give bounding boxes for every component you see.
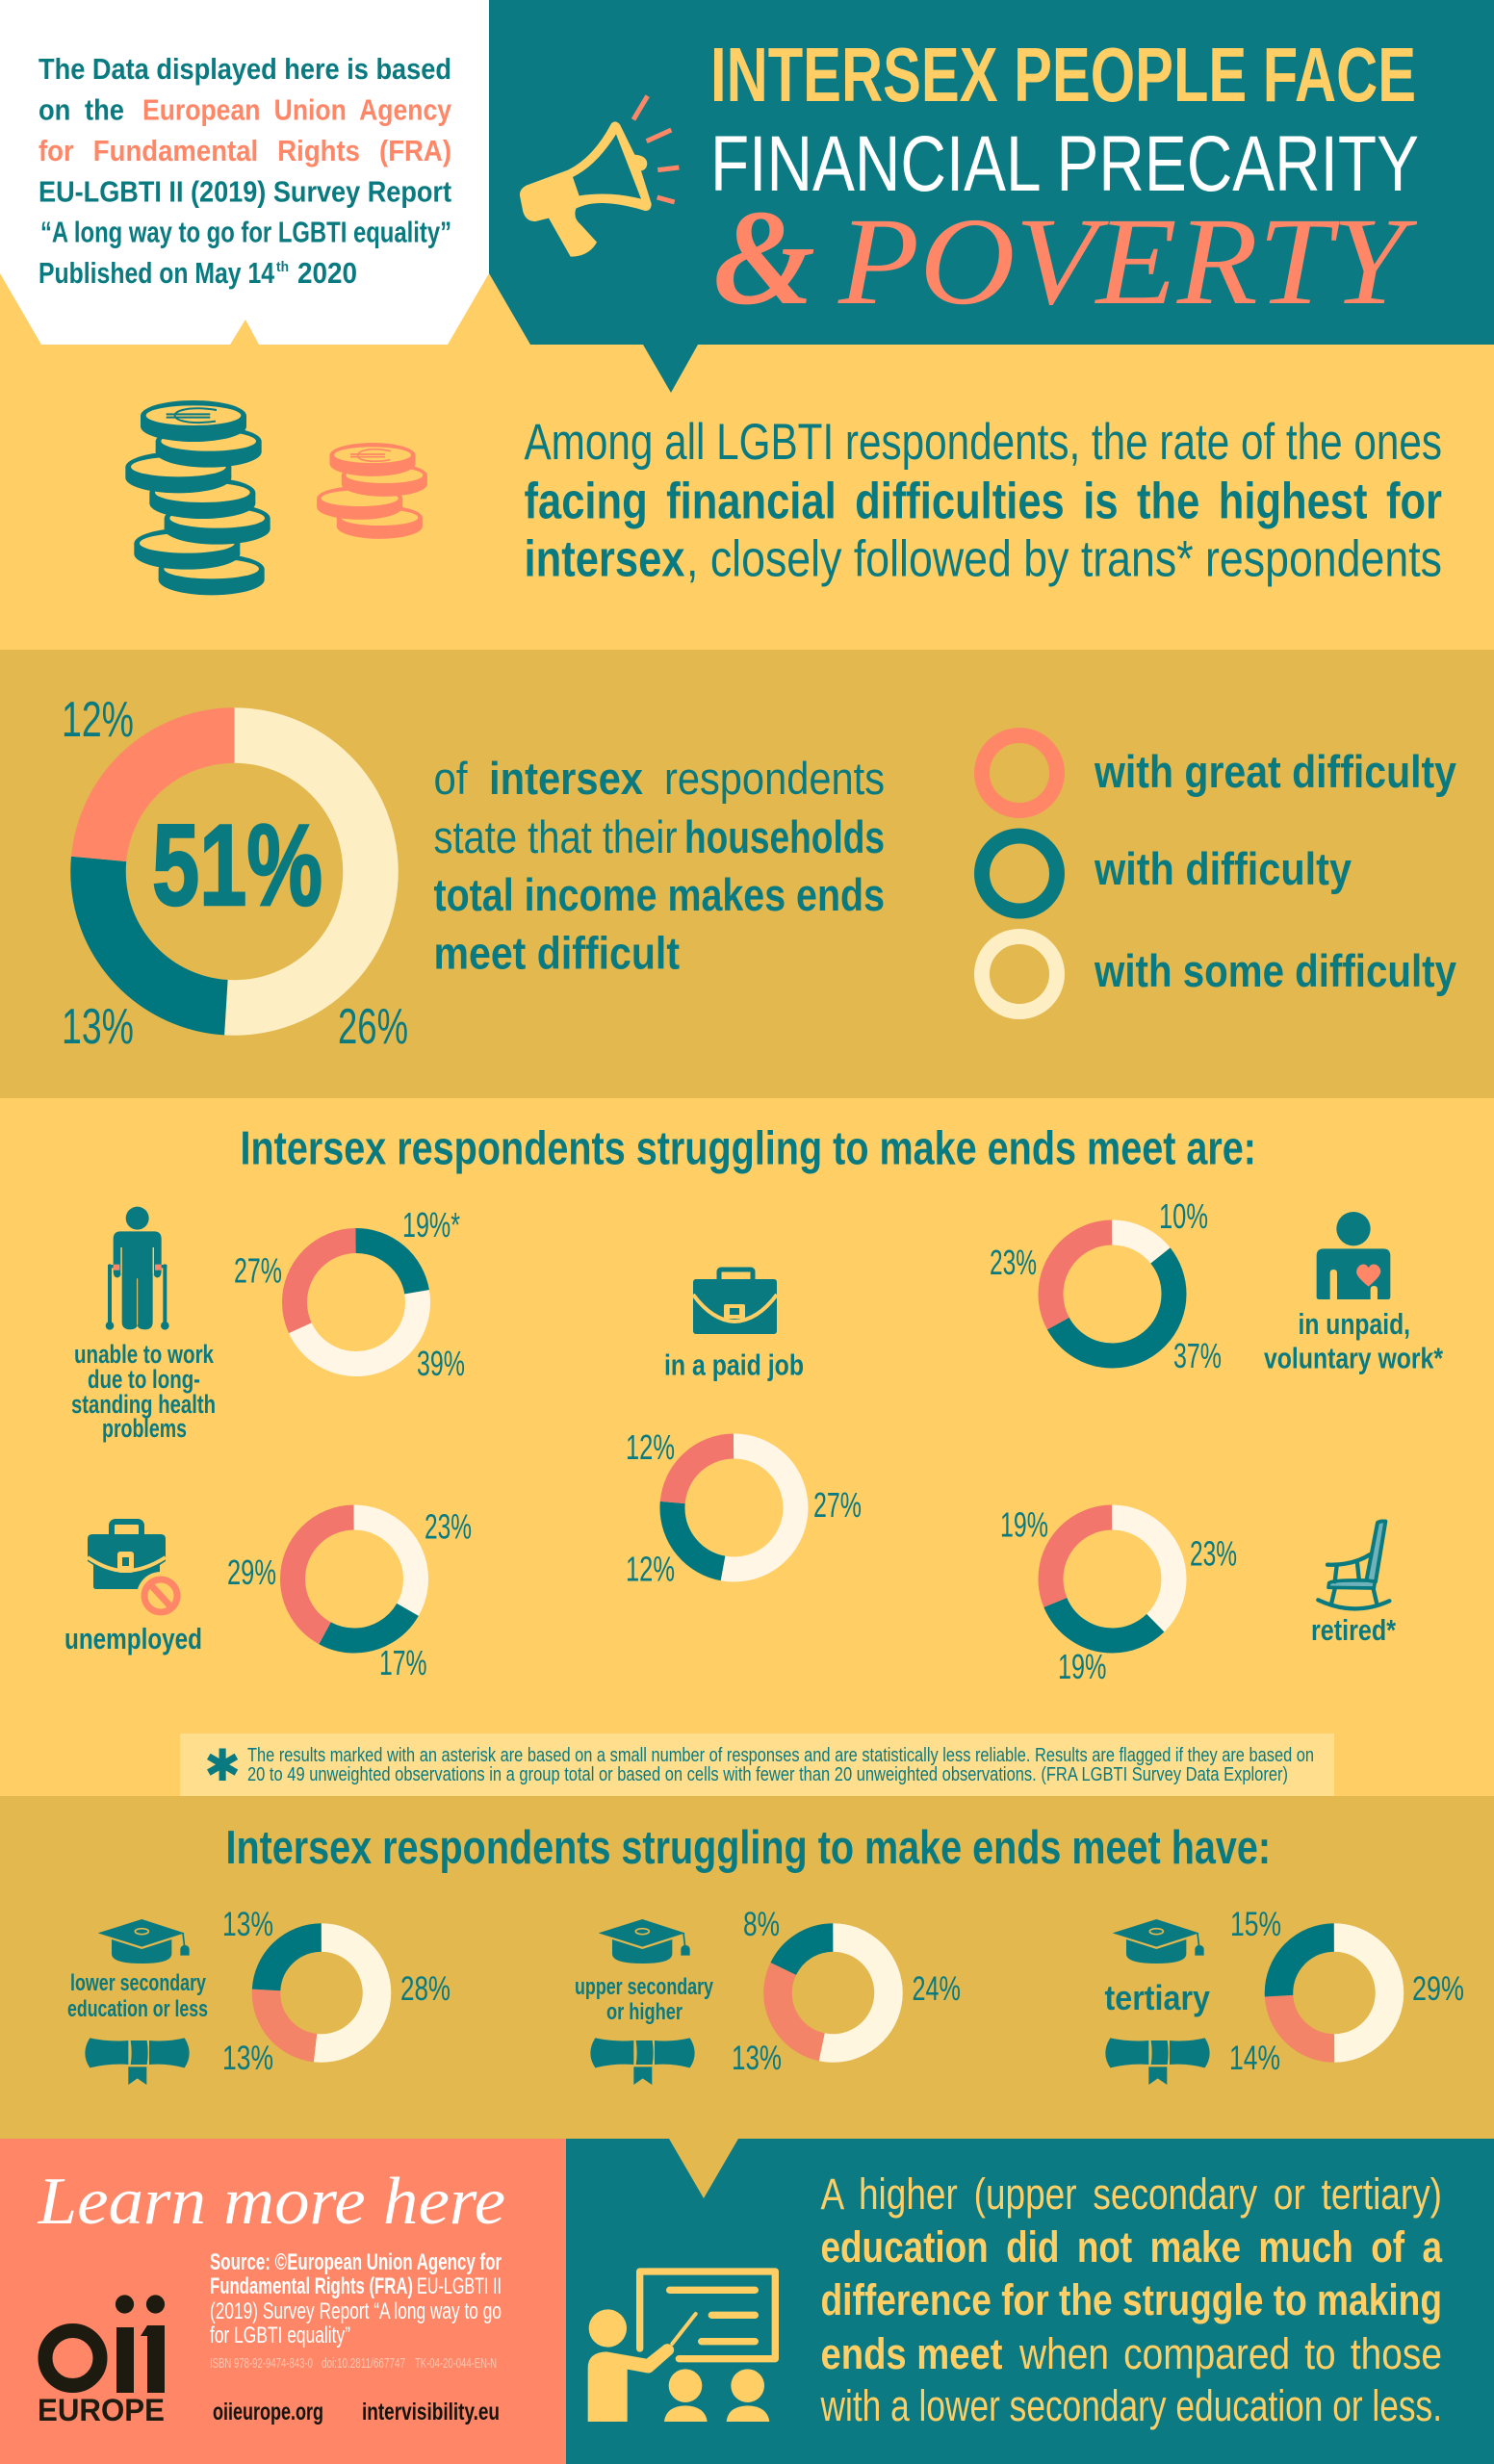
donut labels: 12% — [62, 692, 134, 748]
panel: data source note: EU-LGBTI II (2019) Survey Report — [39, 175, 451, 208]
overview text — [433, 753, 885, 978]
label: tertiary: tertiary — [1105, 1978, 1210, 2017]
chart: retired donut — [1051, 1517, 1174, 1640]
overview text: state that their — [433, 811, 678, 862]
label: unemployed: unemployed — [64, 1622, 202, 1656]
heading: Intersex respondents struggling to make ends meet have: — [225, 1822, 1271, 1874]
overview text: intersex — [489, 753, 643, 804]
asterisk footnote — [180, 1733, 1334, 1796]
legend: with difficulty — [1094, 843, 1352, 894]
icon: diploma upper secondary — [590, 2038, 695, 2085]
asterisk footnote: ✱ — [204, 1739, 241, 1791]
panel: data source note: “A long way to go for LGBTI equality” — [40, 216, 451, 248]
source text: (2019) Survey Report “A long way to go — [210, 2298, 502, 2324]
chart: main donut — [98, 735, 371, 1008]
icon: rocking chair — [1318, 1521, 1389, 1608]
donut labels: paid job — [626, 1427, 862, 1588]
icon: large teal coin stack — [125, 400, 270, 595]
donut labels: 13% — [62, 999, 134, 1055]
publication identifiers: TK-04-20-044-EN-N — [415, 2355, 497, 2372]
donut labels: upper secondary: 13% — [732, 2040, 782, 2077]
donut labels: tertiary — [1229, 1906, 1464, 2077]
label: unable to work: unable to work — [74, 1340, 215, 1369]
icon: person with crutches — [106, 1207, 169, 1330]
publication identifiers: ISBN 978-92-9474-843-0 — [210, 2355, 313, 2372]
donut labels: retired: 19% — [1058, 1647, 1107, 1686]
donut labels: voluntary work: 23% — [990, 1243, 1037, 1282]
overview text: of — [433, 753, 468, 804]
website links — [213, 2399, 500, 2426]
source text: Source: ©European Union Agency for — [210, 2249, 502, 2275]
donut labels: lower secondary — [222, 1906, 451, 2077]
label: in unpaid voluntary work: in unpaid, — [1298, 1307, 1410, 1341]
donut labels: retired: 23% — [1190, 1534, 1237, 1573]
chart: unemployed donut — [293, 1517, 416, 1640]
donut labels: upper secondary — [732, 1906, 961, 2077]
donut labels: upper secondary: 24% — [913, 1970, 961, 2008]
chart: tertiary donut — [1278, 1938, 1390, 2048]
panel: data source note: on the — [39, 92, 124, 127]
logo: OII Europe — [38, 2295, 165, 2427]
icon: graduation cap upper secondary — [599, 1919, 690, 1964]
donut labels: voluntary work — [990, 1196, 1222, 1375]
intro text: intersex — [524, 531, 685, 587]
panel: title banner — [489, 0, 1494, 393]
donut labels: tertiary: 14% — [1229, 2040, 1280, 2077]
label: upper secondary — [575, 1974, 713, 2025]
heading: Intersex respondents struggling to make ends meet are: — [241, 1122, 1256, 1174]
donut labels: unemployed — [227, 1507, 472, 1682]
donut labels: tertiary: 29% — [1412, 1970, 1464, 2008]
source text — [210, 2249, 502, 2348]
donut labels: unemployed: 17% — [379, 1643, 427, 1682]
donut labels: retired — [1000, 1505, 1237, 1686]
donut labels: 26% — [338, 999, 408, 1055]
source text: Fundamental Rights (FRA) — [210, 2273, 413, 2299]
donut labels: lower secondary: 13% — [222, 2040, 273, 2077]
source text: EU-LGBTI II — [417, 2273, 502, 2299]
chart: lower secondary donut — [266, 1938, 377, 2048]
overview text: respondents — [664, 753, 885, 804]
icon: graduation cap lower secondary — [98, 1919, 190, 1964]
conclusion text: ends meet — [820, 2329, 1003, 2378]
overview text: meet difficult — [433, 928, 680, 978]
chart: upper secondary donut — [778, 1938, 889, 2048]
donut labels: unable to work: 19%* — [402, 1205, 460, 1245]
donut labels: upper secondary: 8% — [743, 1906, 780, 1943]
donut labels: unemployed: 29% — [227, 1553, 276, 1592]
donut labels: paid job: 27% — [813, 1485, 862, 1525]
title line 3: POVERTY — [837, 192, 1417, 331]
panel: data source note: 2020 — [297, 256, 357, 290]
icon: person with heart — [1317, 1212, 1390, 1299]
publication identifiers — [210, 2355, 497, 2372]
label: unable to work: problems — [102, 1414, 187, 1443]
chart: voluntary work donut — [1051, 1232, 1174, 1355]
arrow: pointer from education panel — [669, 2139, 738, 2198]
panel: data source note: Published on May 14 — [39, 256, 275, 290]
panel: 51 percent overview — [0, 650, 1494, 1098]
panel: learn more — [0, 2139, 566, 2464]
icon: diploma lower secondary — [85, 2038, 190, 2085]
panel: data source note: European Union Agency — [142, 92, 452, 127]
conclusion text: when compared to those — [1018, 2329, 1442, 2378]
intro text — [524, 414, 1442, 587]
donut centre value: 51% — [152, 801, 322, 930]
label: unable to work: due to long- — [88, 1365, 200, 1394]
icon: small coral coin stack — [317, 443, 427, 539]
label: lower secondary — [67, 1970, 208, 2022]
donut labels: unable to work — [234, 1205, 465, 1383]
donut labels — [62, 692, 408, 1055]
heading: learn more here: Learn more here — [37, 2165, 505, 2239]
panel: education — [0, 1796, 1494, 2139]
website links: intervisibility.eu — [362, 2399, 500, 2426]
label: lower secondary: education or less — [67, 1996, 208, 2022]
asterisk footnote: 20 to 49 unweighted observations in a group total or based on cells with fewer than 20 unweighted observations. (FRA LGBTI Survey Data Explorer) — [247, 1764, 1288, 1785]
source text: for LGBTI equality” — [210, 2323, 350, 2348]
donut labels: unemployed: 23% — [425, 1507, 472, 1546]
icon: briefcase — [693, 1270, 777, 1334]
label: upper secondary: or higher — [606, 1999, 683, 2025]
panel: data source note: for Fundamental Rights (FRA) — [39, 134, 451, 167]
label: in unpaid voluntary work — [1264, 1307, 1444, 1374]
donut labels: retired: 19% — [1000, 1505, 1048, 1544]
chart: unable to work donut — [295, 1241, 418, 1364]
label: in a paid job: in a paid job — [664, 1348, 804, 1382]
donut labels: voluntary work: 10% — [1159, 1196, 1208, 1236]
donut labels: paid job: 12% — [626, 1550, 675, 1588]
panel: intro statement — [125, 400, 1442, 595]
logo: OII Europe: EUROPE — [38, 2393, 165, 2427]
icon: diploma tertiary — [1105, 2038, 1210, 2085]
icon: briefcase with prohibition sign — [88, 1522, 185, 1620]
publication identifiers: doi:10.2811/667747 — [322, 2355, 405, 2372]
label: in unpaid voluntary work: voluntary work* — [1264, 1342, 1444, 1374]
donut labels: unable to work: 39% — [417, 1344, 465, 1383]
title line 3: & — [713, 181, 815, 333]
overview text: total income makes ends — [433, 869, 885, 920]
website links: oiieurope.org — [213, 2399, 323, 2426]
donut labels: tertiary: 15% — [1230, 1906, 1281, 1943]
donut labels: voluntary work: 37% — [1173, 1336, 1222, 1375]
panel: data source note: The Data displayed here is based — [39, 52, 451, 86]
label: retired: retired* — [1311, 1613, 1397, 1647]
donut labels: lower secondary: 13% — [222, 1906, 273, 1943]
chart: paid job donut — [672, 1446, 795, 1569]
legend — [982, 735, 1456, 1012]
panel: data source note — [0, 0, 489, 345]
label: upper secondary: upper secondary — [575, 1974, 713, 2000]
panel: employment status — [64, 1122, 1444, 1796]
icon: graduation cap tertiary — [1113, 1919, 1204, 1964]
donut labels: unable to work: 27% — [234, 1251, 282, 1290]
label: lower secondary: lower secondary — [70, 1970, 206, 1996]
label: unable to work — [71, 1340, 216, 1443]
donut labels: lower secondary: 28% — [400, 1970, 451, 2008]
icon: megaphone — [520, 96, 679, 257]
panel: data source note: th — [276, 259, 289, 275]
panel: education conclusion — [566, 2139, 1494, 2464]
conclusion text — [820, 2169, 1443, 2430]
label: unable to work: standing health — [71, 1390, 216, 1419]
title line 3 — [713, 181, 1417, 333]
icon: teacher with students — [588, 2272, 775, 2422]
overview text: households — [684, 811, 885, 862]
donut labels: paid job: 12% — [626, 1427, 675, 1467]
